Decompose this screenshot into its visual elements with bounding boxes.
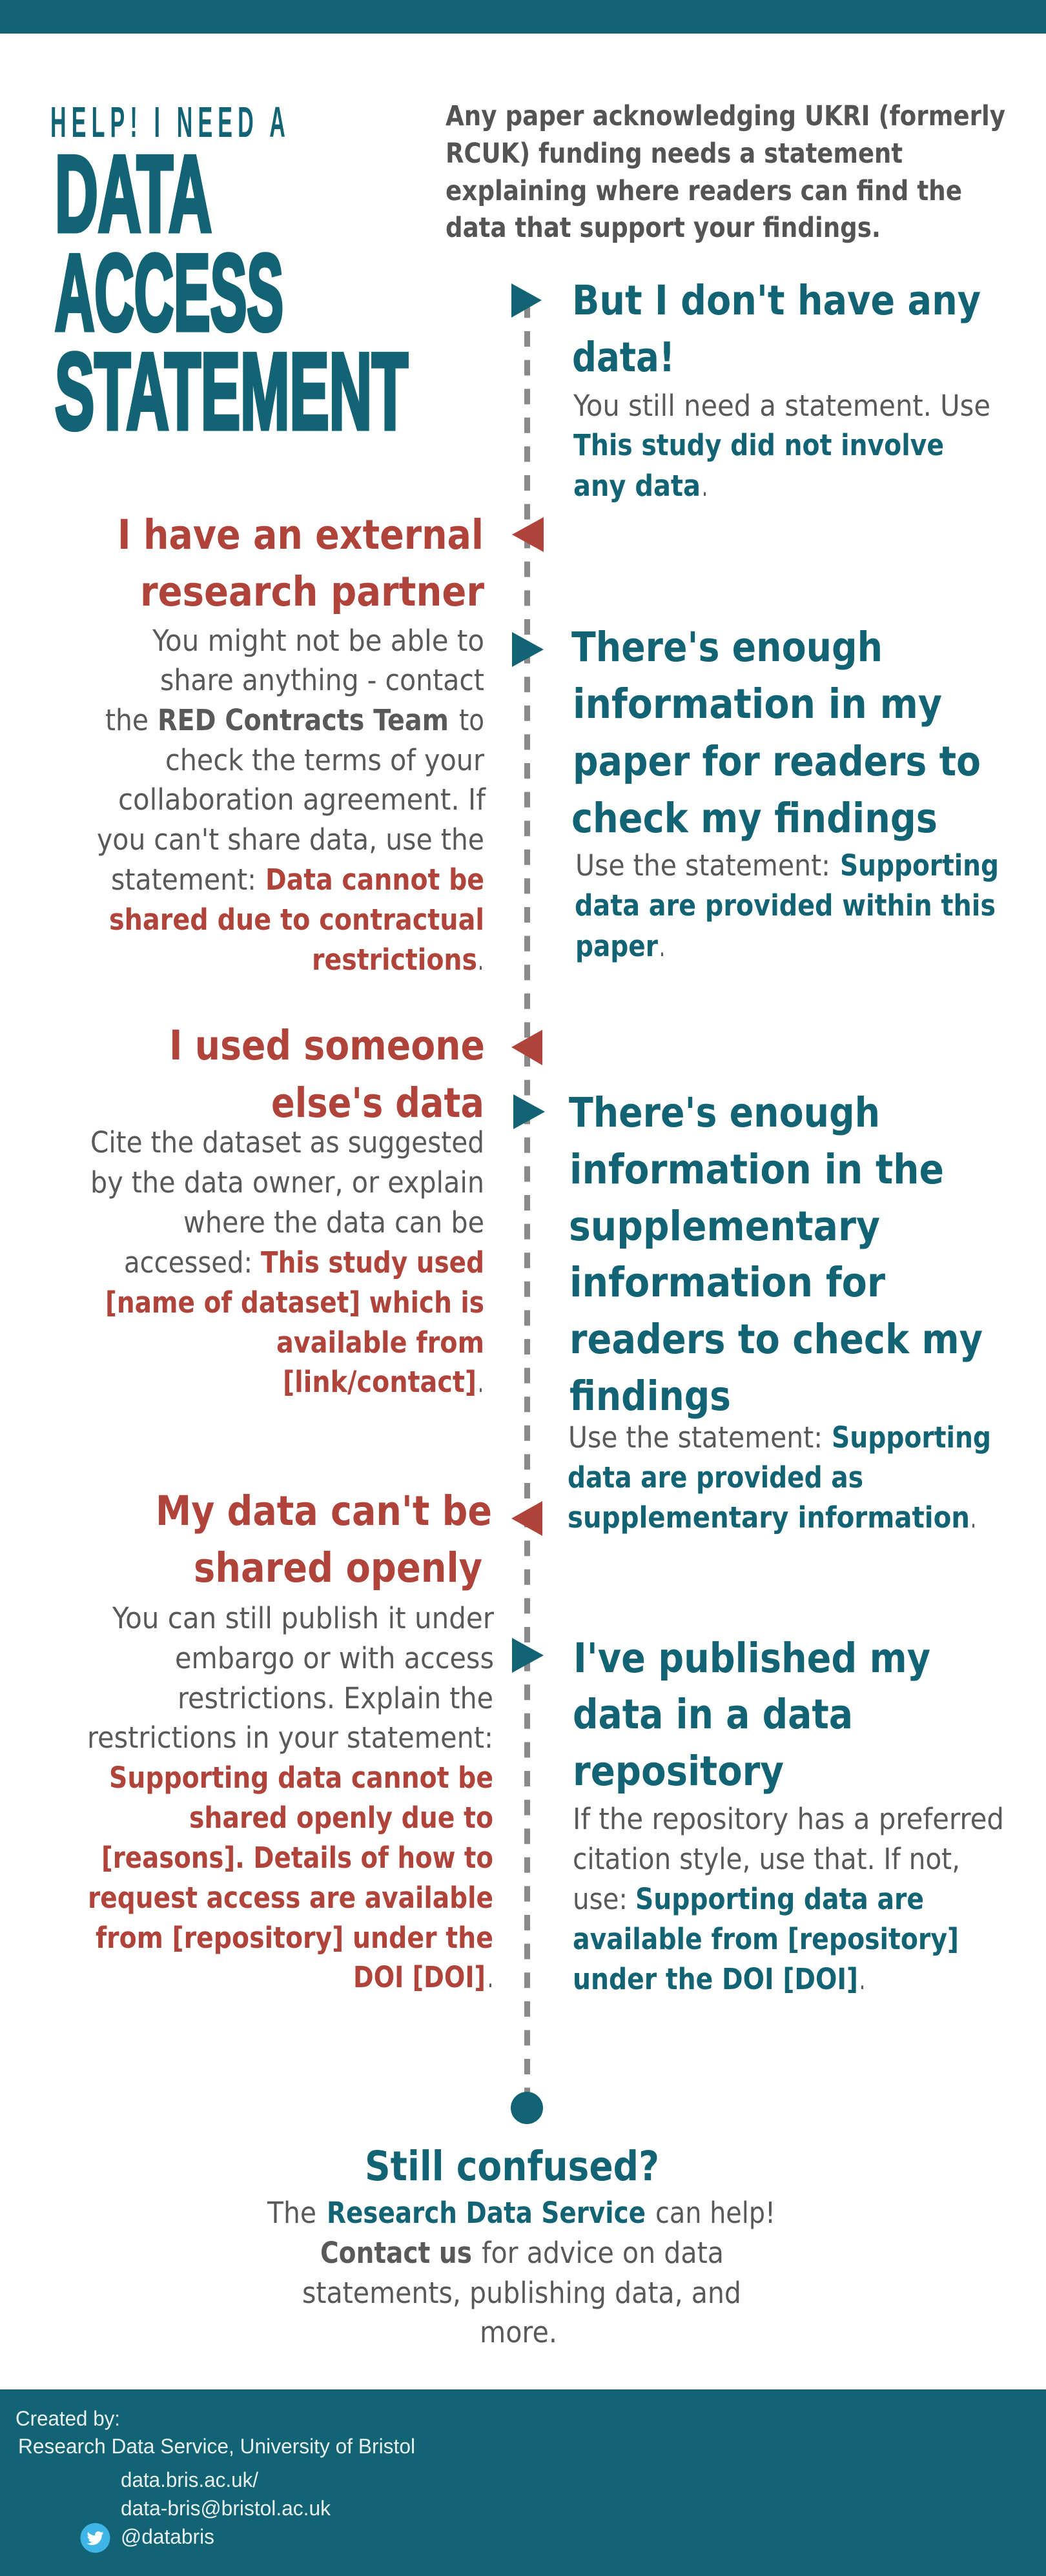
text: external partner: Data cannot be xyxy=(265,863,484,897)
text: contact the service: statements, publishing data, and xyxy=(302,2276,741,2310)
heading: enough information in supplementary: information in the xyxy=(569,1146,944,1193)
panel: enough information in supplementary xyxy=(568,1089,991,1535)
heading: published in repository: I've published my xyxy=(573,1635,930,1682)
icon: twitter xyxy=(80,2523,110,2553)
text: can't be shared openly: request access are available xyxy=(88,1881,493,1915)
timeline end dot xyxy=(511,2092,543,2124)
text: enough information in paper: Supporting xyxy=(840,848,999,883)
text: external partner: to xyxy=(459,703,484,737)
contact links: @databris xyxy=(121,2525,214,2548)
text: enough information in paper: data are provided within this xyxy=(575,888,996,923)
arrow: published in repository xyxy=(512,1638,544,1673)
arrow: someone else's data xyxy=(511,1030,542,1065)
heading: enough information in supplementary: There's enough xyxy=(569,1089,880,1136)
text: someone else's data: [link/contact] xyxy=(283,1365,477,1399)
text: enough information in supplementary: data are provided as xyxy=(568,1460,863,1495)
text: can't be shared openly: [reasons]. Details of how to xyxy=(101,1841,493,1875)
timeline dashed line xyxy=(524,302,530,2098)
arrow: external partner xyxy=(512,517,544,552)
panel: still confused xyxy=(267,2143,775,2349)
panel: can't be shared openly xyxy=(87,1487,494,1994)
text: external partner: share anything - contact xyxy=(160,663,484,697)
heading: external partner: I have an external xyxy=(118,511,484,558)
text: someone else's data: . xyxy=(478,1365,484,1399)
text: can't be shared openly: shared openly due to xyxy=(189,1801,493,1835)
text: published in repository: If the repository has a preferred xyxy=(573,1802,1004,1836)
text: no data: This study did not involve xyxy=(573,428,944,462)
heading: enough information in paper: check my findings xyxy=(571,795,938,842)
text: can't be shared openly: . xyxy=(487,1960,493,1994)
text: external partner: you can't share data, use the xyxy=(97,823,484,857)
heading: no data xyxy=(572,277,981,381)
heading: published in repository: data in a data xyxy=(573,1691,853,1738)
text: can't be shared openly: embargo or with access xyxy=(175,1641,494,1675)
heading: enough information in paper: There's enough xyxy=(571,624,883,671)
heading: published in repository: repository xyxy=(573,1748,784,1795)
heading: enough information in supplementary: readers to check my xyxy=(569,1316,983,1363)
text: no data: You still need a statement. Use xyxy=(573,389,990,423)
text: published in repository: under the DOI [DOI] xyxy=(573,1962,858,1996)
text: external partner: . xyxy=(478,943,484,977)
text: someone else's data: This study used xyxy=(261,1245,484,1280)
text: contact the service: for advice on data xyxy=(482,2236,724,2270)
arrow: no data xyxy=(511,283,542,318)
contact links xyxy=(121,2468,331,2548)
heading: enough information in supplementary: supplementary xyxy=(569,1203,880,1250)
credit text: Created by: xyxy=(15,2407,120,2430)
title: HELP! I NEED A xyxy=(50,98,291,147)
text: published in repository: citation style, use that. If not, xyxy=(573,1842,960,1876)
contact links: data-bris@bristol.ac.uk xyxy=(121,2497,331,2520)
text: enough information in supplementary: . xyxy=(970,1500,976,1535)
contact links: data.bris.ac.uk/ xyxy=(121,2468,258,2491)
heading: someone else's data: else's data xyxy=(271,1079,484,1127)
text: published in repository xyxy=(573,1802,1004,1996)
panel: published in repository xyxy=(573,1635,1004,1996)
text: can't be shared openly: restrictions in your statement: xyxy=(87,1721,493,1755)
text: someone else's data: where the data can be xyxy=(183,1205,484,1240)
text: contact the service: more. xyxy=(480,2315,557,2349)
heading: no data: data! xyxy=(572,334,675,381)
title xyxy=(50,98,408,452)
heading: someone else's data xyxy=(169,1022,485,1127)
text: published in repository: available from [repository] xyxy=(573,1922,959,1956)
intro text: RCUK) funding needs a statement xyxy=(446,138,903,170)
heading: published in repository xyxy=(573,1635,930,1795)
text: can't be shared openly: restrictions. Explain the xyxy=(178,1681,493,1715)
credit text: Research Data Service, University of Bristol xyxy=(18,2435,415,2458)
heading: enough information in supplementary: findings xyxy=(569,1373,731,1420)
text: published in repository: . xyxy=(859,1962,865,1996)
text: no data: . xyxy=(702,469,708,503)
credit text xyxy=(15,2407,415,2458)
text: enough information in paper: . xyxy=(659,929,665,963)
heading: can't be shared openly xyxy=(156,1487,492,1591)
text: someone else's data: available from xyxy=(276,1325,484,1360)
panel: enough information in paper xyxy=(571,624,999,963)
text: someone else's data: by the data owner, or explain xyxy=(90,1165,484,1200)
heading: someone else's data: I used someone xyxy=(169,1022,485,1069)
text: external partner: restrictions xyxy=(312,943,477,977)
title: STATEMENT xyxy=(55,331,408,452)
text: enough information in paper: paper xyxy=(575,929,659,963)
text: external partner xyxy=(97,624,486,977)
panel: footer xyxy=(0,2389,1046,2576)
text: can't be shared openly xyxy=(87,1601,494,1994)
text: enough information in supplementary: supplementary information xyxy=(568,1500,970,1535)
heading: enough information in paper: information in my xyxy=(573,680,942,728)
text: can't be shared openly: DOI [DOI] xyxy=(353,1960,486,1994)
text: contact the service: can help! xyxy=(655,2196,775,2230)
panel: no data xyxy=(572,277,990,503)
text: enough information in paper xyxy=(575,848,999,963)
panel: someone else's data xyxy=(90,1022,485,1399)
heading: external partner xyxy=(118,511,484,615)
text: no data: any data xyxy=(573,469,701,503)
arrow: can't be shared openly xyxy=(511,1501,542,1536)
text: enough information in supplementary: Supporting xyxy=(832,1420,991,1455)
intro text xyxy=(446,100,1005,244)
text: published in repository: use: xyxy=(573,1882,628,1916)
text: enough information in paper: Use the statement: xyxy=(575,848,830,883)
text: external partner: You might not be able to xyxy=(152,624,484,658)
footer background xyxy=(0,2389,1046,2576)
text: external partner: check the terms of your xyxy=(165,743,484,777)
arrow: enough information in paper xyxy=(512,632,544,667)
text: external partner: statement: xyxy=(111,863,256,897)
top banner xyxy=(0,0,1046,34)
text: contact the service: Contact us xyxy=(320,2236,472,2270)
text: external partner: the xyxy=(105,703,149,737)
text: can't be shared openly: You can still publish it under xyxy=(112,1601,494,1635)
intro text: explaining where readers can find the xyxy=(446,175,962,207)
text: contact the service: The xyxy=(267,2196,316,2230)
text: external partner: shared due to contractual xyxy=(109,903,484,937)
heading: enough information in supplementary xyxy=(569,1089,983,1420)
heading: enough information in paper xyxy=(571,624,981,842)
text: someone else's data: accessed: xyxy=(124,1245,252,1280)
text: can't be shared openly: from [repository] under the xyxy=(96,1921,493,1955)
text: no data xyxy=(573,389,990,503)
text: someone else's data xyxy=(90,1125,484,1399)
heading: still confused: Still confused? xyxy=(365,2143,659,2190)
heading: can't be shared openly: shared openly xyxy=(194,1544,482,1591)
text: external partner: collaboration agreement. If xyxy=(118,782,486,817)
text: external partner: RED Contracts Team xyxy=(158,703,449,737)
text: published in repository: Supporting data are xyxy=(635,1882,924,1916)
title: ACCESS xyxy=(55,232,283,353)
text: contact the service: Research Data Service xyxy=(327,2196,646,2230)
title: DATA xyxy=(55,133,212,254)
heading: can't be shared openly: My data can't be xyxy=(156,1487,492,1535)
heading: no data: But I don't have any xyxy=(572,277,981,324)
text: contact the service xyxy=(267,2196,775,2349)
text: someone else's data: Cite the dataset as suggested xyxy=(90,1125,484,1160)
intro text: data that support your findings. xyxy=(446,212,881,244)
panel: external partner xyxy=(97,511,486,977)
text: enough information in supplementary xyxy=(568,1420,991,1535)
heading: enough information in supplementary: information for xyxy=(569,1259,885,1306)
text: someone else's data: [name of dataset] which is xyxy=(105,1285,484,1320)
text: can't be shared openly: Supporting data cannot be xyxy=(109,1761,493,1795)
heading: enough information in paper: paper for readers to xyxy=(573,738,981,785)
text: enough information in supplementary: Use the statement: xyxy=(568,1420,823,1455)
arrow: enough information in supplementary xyxy=(513,1094,545,1129)
heading: external partner: research partner xyxy=(140,568,484,615)
